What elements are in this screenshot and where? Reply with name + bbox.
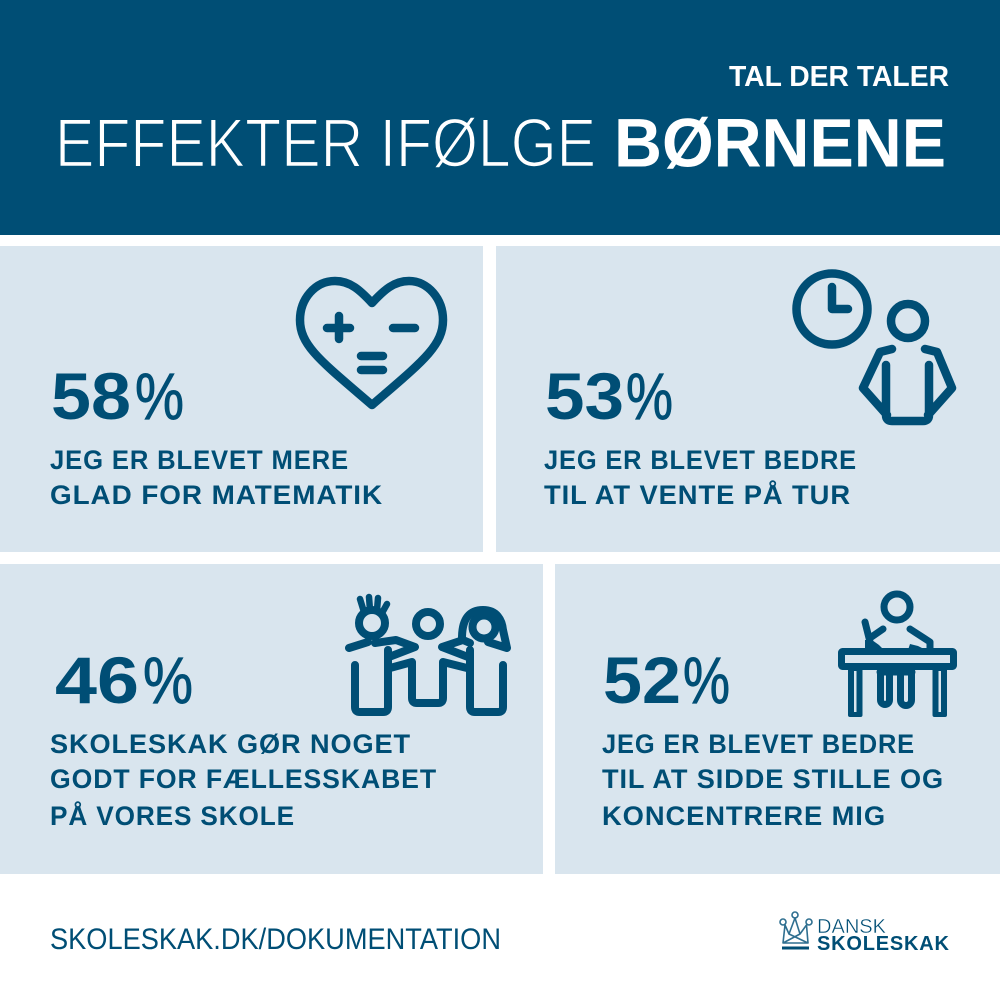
stat 46% — [55, 643, 193, 717]
title: BØRNENE — [614, 104, 946, 182]
label: JEG ER BLEVET MERE — [50, 445, 349, 475]
label: PÅ VORES SKOLE — [50, 800, 295, 831]
stat 58%: 58 — [51, 359, 131, 433]
kicker: TAL DER TALER — [729, 61, 949, 93]
panel: community — [0, 564, 543, 874]
logo: Dansk Skoleskak — [780, 912, 950, 955]
label — [544, 445, 857, 510]
stat 53%: % — [626, 359, 673, 433]
stat 58%: % — [135, 359, 184, 433]
label: JEG ER BLEVET BEDRE — [602, 729, 915, 759]
label: JEG ER BLEVET BEDRE — [544, 445, 857, 475]
label — [50, 729, 437, 831]
icon: child at desk — [842, 594, 954, 717]
stat 46%: % — [143, 643, 193, 717]
stat 52%: 52 — [603, 643, 681, 717]
icon: crown — [780, 912, 812, 950]
icon: clock and person — [796, 274, 952, 421]
stat 52% — [603, 643, 730, 717]
icon: three children — [349, 597, 507, 712]
label: TIL AT VENTE PÅ TUR — [544, 479, 851, 510]
label: KONCENTRERE MIG — [602, 801, 886, 831]
stat 58% — [51, 359, 184, 433]
footer url: SKOLESKAK.DK/DOKUMENTATION — [50, 923, 501, 956]
stat 53%: 53 — [545, 359, 624, 433]
stat 46%: 46 — [55, 643, 139, 717]
label: GLAD FOR MATEMATIK — [50, 480, 383, 510]
panel: concentration — [555, 564, 1000, 874]
label — [50, 445, 383, 510]
logo: Dansk Skoleskak: SKOLESKAK — [817, 933, 950, 955]
label: GODT FOR FÆLLESSKABET — [50, 764, 437, 794]
panel: waiting — [496, 246, 1000, 552]
label — [602, 729, 944, 831]
label: TIL AT SIDDE STILLE OG — [602, 764, 944, 794]
panel: math — [0, 246, 483, 552]
header band — [0, 0, 1000, 235]
label: SKOLESKAK GØR NOGET — [50, 729, 411, 759]
icon: heart with math signs — [300, 281, 443, 405]
stat 53% — [545, 359, 673, 433]
title: EFFEKTER IFØLGE — [55, 104, 596, 182]
logo: Dansk Skoleskak: DANSK — [817, 916, 887, 938]
stat 52%: % — [683, 643, 730, 717]
